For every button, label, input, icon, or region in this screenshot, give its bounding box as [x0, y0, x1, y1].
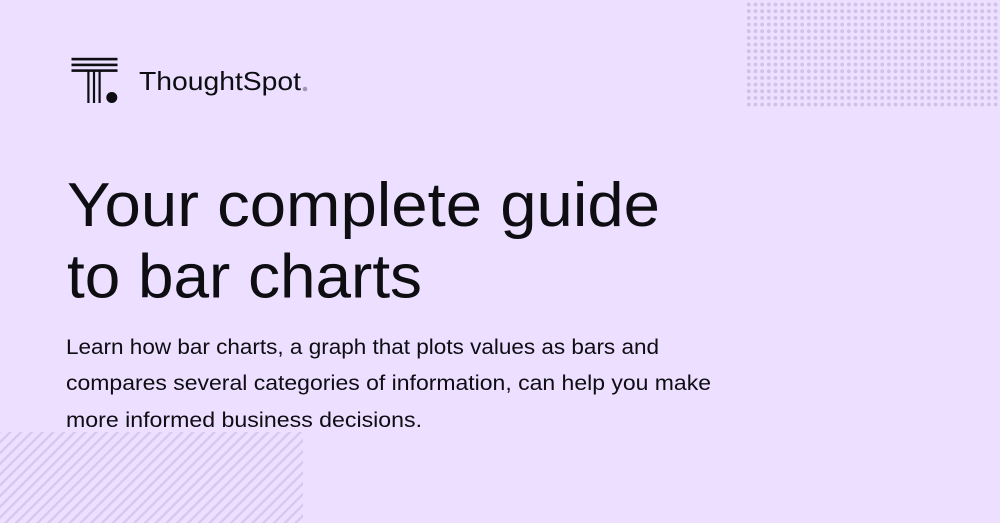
- description text: compares several categories of information, can help you make: [66, 371, 711, 395]
- wordmark: ThoughtSpot: [139, 66, 302, 96]
- logo: ThoughtSpot: [72, 58, 307, 103]
- icon: T mark: [72, 58, 118, 103]
- description text: Learn how bar charts, a graph that plots values as bars and: [66, 335, 659, 359]
- title: [67, 171, 660, 312]
- title: to bar charts: [67, 242, 422, 312]
- dot pattern: [749, 4, 1000, 105]
- stripe pattern: [0, 432, 303, 523]
- title: Your complete guide: [67, 171, 660, 240]
- registered mark: [303, 87, 307, 91]
- description text: more informed business decisions.: [66, 408, 422, 432]
- description text: [66, 335, 711, 432]
